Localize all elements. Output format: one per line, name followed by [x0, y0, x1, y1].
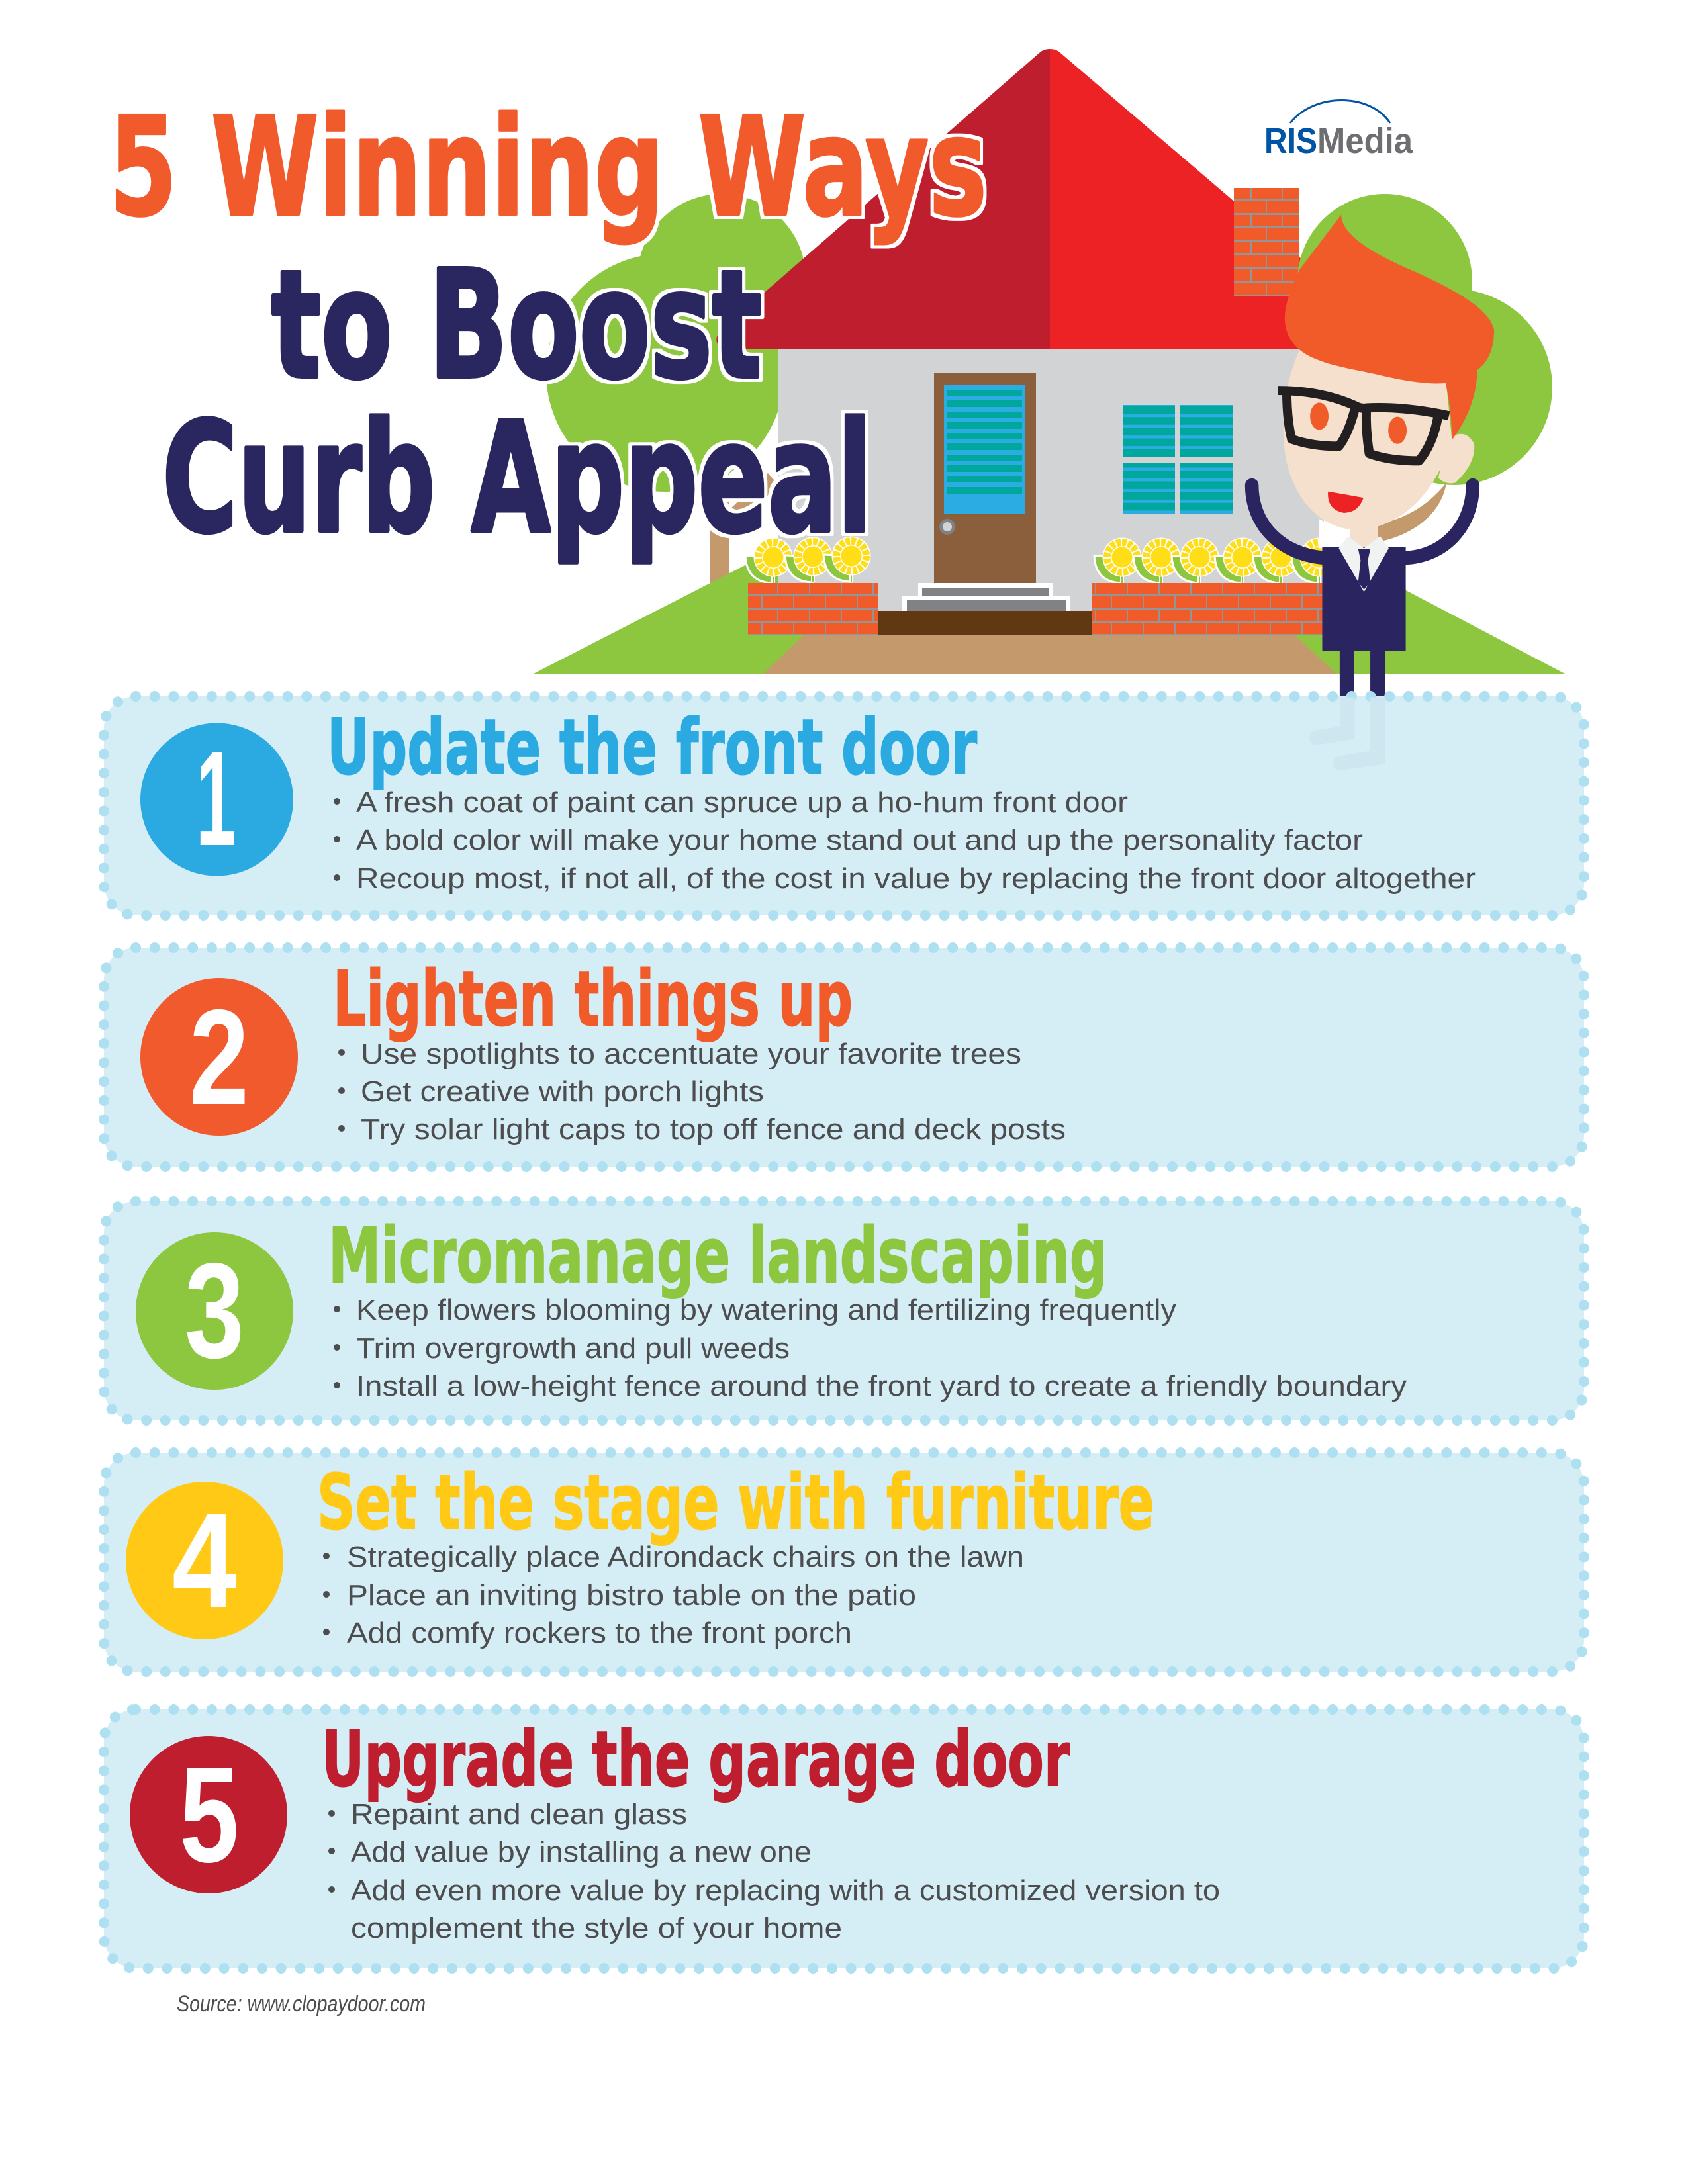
suit	[1322, 536, 1406, 651]
number badge 4	[126, 1482, 283, 1639]
lawn	[534, 547, 1565, 674]
panel background	[104, 1453, 1584, 1672]
arms	[1252, 485, 1473, 558]
house wall	[778, 348, 1324, 635]
heading 3: Micromanage landscaping	[328, 1212, 1107, 1300]
number badge 1	[140, 723, 293, 876]
title: to Boost	[271, 239, 762, 412]
roof	[716, 49, 1407, 349]
number badge 1: 1	[196, 723, 236, 874]
title: Curb Appeal	[162, 390, 872, 567]
number badge 5	[130, 1736, 287, 1893]
bullets 5: Add even more value by replacing with a customized version to	[351, 1874, 1220, 1907]
bullets 3: Trim overgrowth and pull weeds	[356, 1332, 790, 1365]
bullets 5: Repaint and clean glass	[351, 1798, 687, 1831]
eyes	[1310, 402, 1407, 444]
bullets 1	[334, 786, 1476, 895]
bullets 4: Add comfy rockers to the front porch	[347, 1617, 852, 1649]
bullets 1: A fresh coat of paint can spruce up a ho-hum front door	[356, 786, 1128, 819]
tree: left	[546, 194, 806, 492]
bullets 5: complement the style of your home	[351, 1912, 842, 1944]
bullets 5	[328, 1798, 1220, 1944]
number badge 2: 2	[189, 981, 249, 1133]
character leg reflection	[1309, 698, 1385, 770]
legs	[1340, 648, 1385, 696]
number badge 5: 5	[179, 1739, 239, 1891]
chimney	[1234, 188, 1299, 296]
hair	[1285, 215, 1494, 440]
panel: step 2	[104, 948, 1584, 1167]
bullets 4: Strategically place Adirondack chairs on the lawn	[347, 1541, 1024, 1573]
flowers right	[1094, 537, 1338, 583]
bullets 3: Install a low-height fence around the front yard to create a friendly boundary	[356, 1370, 1407, 1402]
bullets 4: Place an inviting bistro table on the patio	[347, 1579, 916, 1612]
brick planter left	[748, 583, 878, 635]
panel: step 3	[104, 1201, 1584, 1420]
panel background	[104, 1709, 1584, 1968]
number badge 2	[140, 978, 298, 1136]
number badge 3: 3	[185, 1235, 244, 1387]
panel background	[104, 948, 1584, 1167]
neck	[1350, 522, 1378, 551]
bullets 2: Get creative with porch lights	[361, 1075, 764, 1108]
ear	[1438, 434, 1474, 483]
panel background	[104, 696, 1584, 915]
panel background	[104, 1201, 1584, 1420]
bullets 3	[334, 1294, 1407, 1402]
mouth	[1328, 492, 1364, 513]
bullets 5: Add value by installing a new one	[351, 1836, 812, 1868]
panel: step 1	[104, 696, 1584, 915]
brick planter right	[1092, 583, 1324, 635]
tree: right upper crown	[1297, 194, 1472, 369]
bullets 1: Recoup most, if not all, of the cost in value by replacing the front door altogether	[356, 862, 1476, 895]
bullets 2: Use spotlights to accentuate your favorite trees	[361, 1038, 1021, 1070]
heading 5: Upgrade the garage door	[322, 1715, 1070, 1804]
source note: Source: www.clopaydoor.com	[177, 1991, 426, 2017]
shirt collar	[1319, 519, 1350, 548]
number badge 3	[136, 1232, 293, 1390]
glasses	[1278, 390, 1449, 461]
character	[1252, 215, 1494, 696]
logo: RISMedia: Media	[1317, 121, 1413, 161]
bullets 3: Keep flowers blooming by watering and fertilizing frequently	[356, 1294, 1176, 1326]
panel: step 5	[104, 1709, 1584, 1968]
bullets 2: Try solar light caps to top off fence and deck posts	[361, 1113, 1066, 1146]
logo: RISMedia: RIS	[1264, 121, 1317, 161]
heading 2: Lighten things up	[333, 955, 853, 1044]
steps	[878, 583, 1092, 635]
tree trunk	[692, 463, 780, 611]
house	[716, 49, 1407, 674]
neck shadow	[1378, 482, 1446, 542]
door	[934, 373, 1036, 583]
title: 5 Winning Ways	[109, 88, 987, 247]
heading 1: Update the front door	[327, 704, 977, 792]
face	[1284, 349, 1452, 530]
bullets 1: A bold color will make your home stand out and up the personality factor	[356, 824, 1363, 856]
path	[763, 635, 1336, 674]
window	[1123, 405, 1233, 514]
bullets 2	[338, 1038, 1066, 1146]
heading 4: Set the stage with furniture	[317, 1459, 1154, 1547]
tree: right	[1356, 289, 1552, 485]
panel: step 4	[104, 1453, 1584, 1672]
number badge 4: 4	[172, 1484, 237, 1636]
logo: RISMedia	[1264, 101, 1413, 161]
title	[109, 88, 987, 567]
bullets 4	[323, 1541, 1024, 1649]
flowers left	[745, 536, 871, 583]
